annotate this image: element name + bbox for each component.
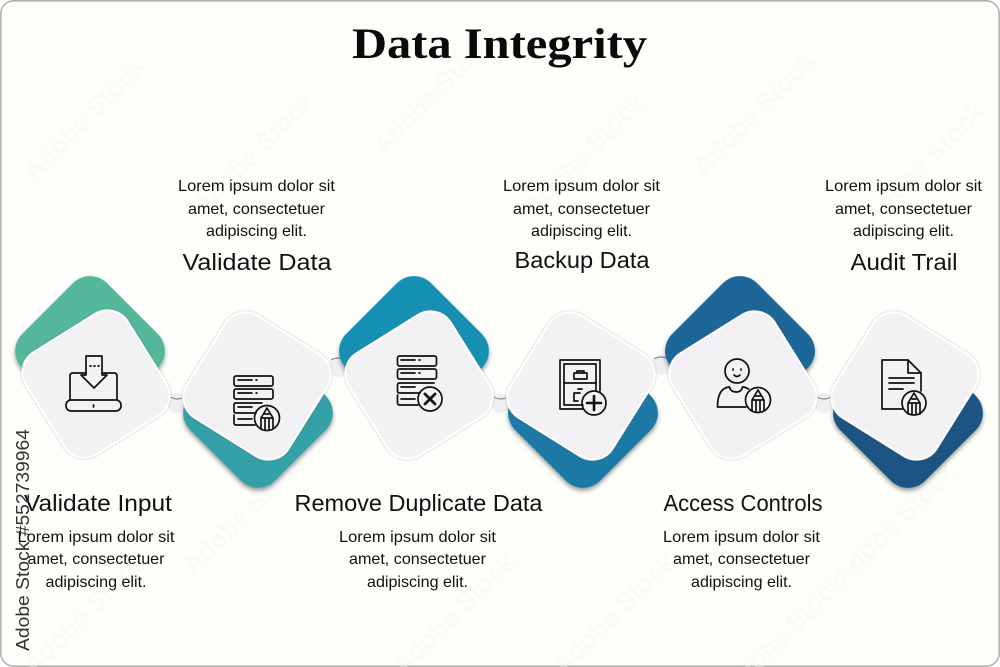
front card bbox=[13, 301, 179, 467]
back card: blue bbox=[329, 266, 499, 436]
stock id label: Adobe Stock #552739964 bbox=[13, 429, 33, 651]
text block: access controls bbox=[663, 490, 822, 591]
text block: backup data: amet, consectetuer bbox=[513, 201, 651, 218]
text block: validate input: adipiscing elit. bbox=[46, 574, 146, 591]
back card: green bbox=[5, 266, 175, 436]
watermark: Adobe Stock bbox=[517, 86, 651, 220]
back card: mid blue bbox=[498, 328, 668, 498]
text block: remove duplicate data: Remove Duplicate Data bbox=[294, 490, 543, 516]
text block: backup data: Backup Data bbox=[514, 247, 650, 273]
icon: laptop with download arrow bbox=[66, 356, 121, 411]
watermark: Adobe Stock bbox=[367, 26, 501, 160]
back card: navy bbox=[823, 328, 993, 498]
text block: audit trail: Lorem ipsum dolor sit bbox=[825, 178, 983, 195]
icon: person with pencil badge bbox=[718, 359, 770, 412]
text block: validate input: amet, consectetuer bbox=[28, 551, 165, 568]
text block: validate input: Lorem ipsum dolor sit bbox=[18, 529, 175, 546]
back card: teal bbox=[173, 328, 343, 498]
step 4: backup data bbox=[498, 303, 668, 498]
watermark: Adobe Stock bbox=[187, 86, 321, 220]
text block: remove duplicate data bbox=[294, 490, 543, 591]
watermark: Adobe Stock bbox=[177, 446, 311, 580]
text block: access controls: amet, consectetuer bbox=[673, 551, 811, 568]
icon: document with pencil badge bbox=[882, 360, 926, 415]
connectors between cards bbox=[167, 355, 834, 413]
text block: remove duplicate data: adipiscing elit. bbox=[367, 574, 468, 591]
front card bbox=[822, 303, 988, 469]
text block: audit trail bbox=[825, 178, 983, 275]
icon: filing cabinet with plus badge bbox=[560, 360, 606, 415]
back card: dark blue bbox=[655, 266, 825, 436]
watermark: Adobe Stock bbox=[17, 51, 151, 185]
text block: access controls: Access Controls bbox=[664, 490, 822, 516]
text block: backup data bbox=[503, 178, 661, 273]
text block: validate input bbox=[18, 490, 175, 591]
text block: validate data: adipiscing elit. bbox=[206, 223, 307, 240]
front card bbox=[174, 303, 340, 469]
text block: validate data: amet, consectetuer bbox=[188, 201, 326, 218]
text block: access controls: Lorem ipsum dolor sit bbox=[663, 529, 821, 546]
step 5: access controls bbox=[655, 266, 826, 468]
watermark: Adobe Stock bbox=[857, 96, 991, 230]
text block: validate data: Validate Data bbox=[182, 249, 332, 275]
text block: validate data bbox=[178, 178, 336, 275]
text block: audit trail: adipiscing elit. bbox=[853, 223, 954, 240]
text block: remove duplicate data: amet, consectetuer bbox=[349, 551, 487, 568]
text block: audit trail: amet, consectetuer bbox=[835, 201, 973, 218]
title: Data Integrity bbox=[352, 21, 648, 68]
text block: remove duplicate data: Lorem ipsum dolor sit bbox=[339, 529, 497, 546]
front card bbox=[660, 302, 826, 468]
front card bbox=[336, 302, 502, 468]
step 6: audit trail bbox=[822, 303, 993, 498]
text block: validate data: Lorem ipsum dolor sit bbox=[178, 178, 336, 195]
text block: access controls: adipiscing elit. bbox=[691, 574, 792, 591]
step 2: validate data bbox=[173, 303, 343, 498]
text block: audit trail: Audit Trail bbox=[850, 249, 958, 275]
watermark: Adobe Stock bbox=[687, 46, 821, 180]
text block: backup data: adipiscing elit. bbox=[531, 223, 632, 240]
text block: validate input: Validate Input bbox=[24, 490, 173, 516]
icon: server stack with pencil badge bbox=[234, 376, 280, 430]
step 1: validate input bbox=[5, 266, 179, 467]
text block: backup data: Lorem ipsum dolor sit bbox=[503, 178, 661, 195]
front card bbox=[498, 303, 664, 469]
watermark: Adobe Stock bbox=[827, 456, 961, 590]
step 3: remove duplicate data bbox=[329, 266, 502, 468]
icon: server stack with cross badge bbox=[398, 356, 442, 411]
